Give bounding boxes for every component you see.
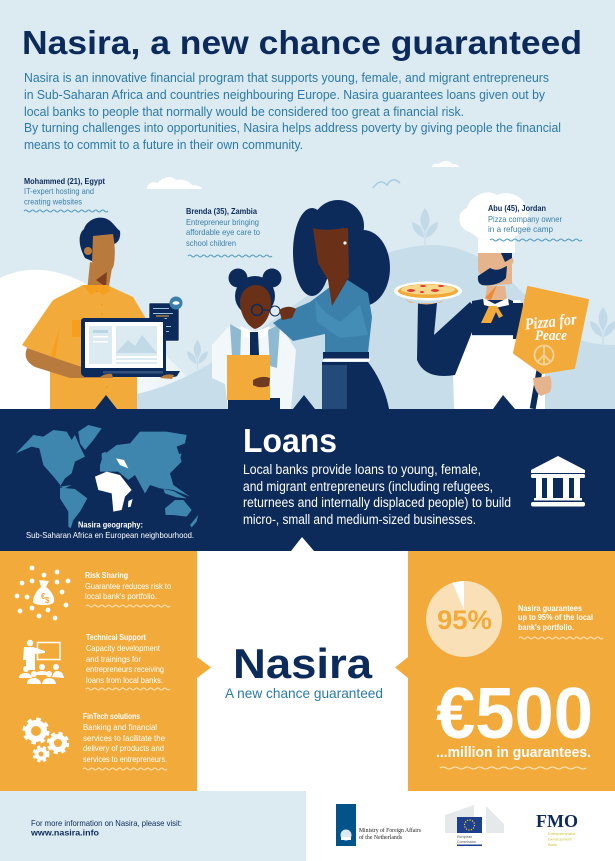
panel: hero background bbox=[0, 0, 615, 410]
figure: Brenda's child with glasses bbox=[212, 268, 296, 409]
big number: €500: €500 bbox=[436, 674, 593, 754]
intro text block: in Sub-Saharan Africa and countries neighbouring Europe. Nasira guarantees loans given out by bbox=[24, 88, 546, 102]
text: risk sharing bbox=[85, 570, 171, 607]
icon: money bag: € bbox=[41, 592, 46, 601]
pie chart 95%: 95% bbox=[437, 605, 492, 635]
intro text block: Nasira is an innovative financial program that supports young, female, and migrant entrepreneurs bbox=[24, 71, 549, 85]
logo: FMO: Development bbox=[548, 836, 572, 842]
text: risk sharing: local bank's portfolio. bbox=[85, 591, 157, 601]
caption: Brenda: school children bbox=[186, 238, 236, 248]
caption: Brenda: affordable eye care to bbox=[186, 227, 260, 237]
clouds and bird bbox=[147, 161, 459, 189]
loans text: Local banks provide loans to young, female, bbox=[243, 462, 481, 477]
icon: gears bbox=[24, 720, 68, 761]
heading: Loans: Loans bbox=[243, 422, 337, 459]
icon: money bag: $ bbox=[45, 596, 50, 605]
logo: European Commission bbox=[445, 805, 504, 846]
intro text block: means to commit to a future in their own community. bbox=[24, 138, 303, 152]
text: fintech solutions: services to entrepreneurs. bbox=[83, 754, 167, 764]
caption: Abu: Pizza company owner bbox=[488, 214, 562, 224]
world map bbox=[16, 425, 198, 528]
loans text: returnees and internally displaced people) to build bbox=[243, 495, 511, 510]
caption: Brenda bbox=[186, 206, 272, 257]
text: fintech solutions bbox=[83, 711, 167, 770]
text: technical support: Technical Support bbox=[86, 632, 146, 642]
map caption: Sub-Saharan Africa en European neighbourhood. bbox=[26, 530, 194, 540]
text: guarantee share bbox=[518, 603, 603, 639]
caption: Abu: Abu (45), Jordan bbox=[488, 203, 546, 213]
figure: Brenda, woman in blue blouse bbox=[273, 200, 390, 409]
loans text: micro-, small and medium-sized businesses. bbox=[243, 512, 476, 527]
intro text block: By turning challenges into opportunities, Nasira helps address poverty by giving people the financial bbox=[24, 121, 561, 135]
caption: Mohammed: Mohammed (21), Egypt bbox=[24, 176, 105, 186]
logo: FMO: Bank bbox=[548, 842, 557, 847]
caption: Mohammed bbox=[24, 176, 108, 212]
text: fintech solutions: FinTech solutions bbox=[83, 711, 140, 721]
title: Nasira, a new chance guaranteed bbox=[22, 25, 582, 62]
text: fintech solutions: delivery of products and bbox=[83, 743, 164, 753]
text: guarantee share: bank's portfolio. bbox=[518, 622, 574, 632]
figure: Abu the pizza chef: Peace bbox=[535, 328, 567, 344]
map caption: Nasira geography: bbox=[78, 520, 143, 530]
figure: Mohammed with laptop bbox=[22, 218, 182, 409]
text: fintech solutions: Banking and financial bbox=[83, 722, 157, 732]
footer text bbox=[30, 818, 182, 838]
logo: European Commission: Commission bbox=[457, 840, 476, 844]
icon: bank bbox=[531, 456, 585, 506]
panel: loans band bbox=[0, 409, 615, 551]
intro text block: local banks to people that normally would be considered too great a financial risk. bbox=[24, 105, 464, 119]
text: risk sharing: Guarantee reduces risk to bbox=[85, 581, 171, 591]
text: technical support: entrepreneurs receiving bbox=[86, 664, 164, 674]
map caption bbox=[26, 520, 194, 540]
intro text block bbox=[24, 71, 561, 152]
caption: Brenda: Brenda (35), Zambia bbox=[186, 206, 257, 216]
icon: teacher and audience bbox=[19, 640, 64, 684]
footer text: For more information on Nasira, please visit: bbox=[31, 818, 182, 828]
logo: FMO: FMO bbox=[536, 811, 578, 831]
text: risk sharing: Risk Sharing bbox=[85, 570, 128, 580]
text: technical support: loans from local banks. bbox=[86, 675, 163, 685]
logo: Ministry of Foreign Affairs: Ministry of Foreign Affairs bbox=[359, 827, 421, 834]
text: guarantee share: up to 95% of the local bbox=[518, 612, 593, 622]
panel: centre white with arrow bbox=[197, 537, 408, 791]
centre logo: Nasira: Nasira bbox=[233, 640, 373, 687]
loans text: and migrant entrepreneurs (including refugees, bbox=[243, 479, 493, 494]
logo: Ministry of Foreign Affairs: of the Netherlands bbox=[359, 834, 402, 841]
footer text: www.nasira.info bbox=[30, 828, 99, 838]
caption: Mohammed: IT-expert hosting and bbox=[24, 186, 94, 196]
pie chart 95% bbox=[426, 581, 502, 657]
decorative plants bbox=[187, 208, 615, 370]
logo: FMO bbox=[536, 811, 578, 847]
text: guarantee share: Nasira guarantees bbox=[518, 603, 582, 613]
panel: footer info bbox=[0, 791, 306, 861]
figure: Abu the pizza chef bbox=[394, 192, 588, 409]
logo: FMO: Entrepreneurial bbox=[548, 831, 575, 836]
logo: Ministry of Foreign Affairs bbox=[336, 804, 421, 846]
text: fintech solutions: services to facilitate the bbox=[83, 733, 165, 743]
text: technical support bbox=[86, 632, 170, 690]
loans text bbox=[243, 462, 511, 527]
caption: Mohammed: creating websites bbox=[24, 196, 82, 206]
panel: left orange services bbox=[0, 551, 211, 791]
caption: Abu bbox=[488, 203, 582, 241]
icon: money bag bbox=[15, 566, 70, 620]
caption: Brenda: Entrepreneur bringing bbox=[186, 217, 259, 227]
panel: right orange figures bbox=[395, 551, 615, 791]
text: technical support: Capacity development bbox=[86, 643, 161, 653]
text: million in guarantees: ...million in guarantees. bbox=[436, 744, 591, 761]
figure: Abu the pizza chef: Pizza for bbox=[523, 309, 578, 334]
caption: Abu: in a refugee camp bbox=[488, 224, 553, 234]
centre tagline: A new chance guaranteed bbox=[225, 685, 383, 701]
text: technical support: and trainings for bbox=[86, 654, 141, 664]
logo: European Commission: European bbox=[457, 835, 472, 839]
